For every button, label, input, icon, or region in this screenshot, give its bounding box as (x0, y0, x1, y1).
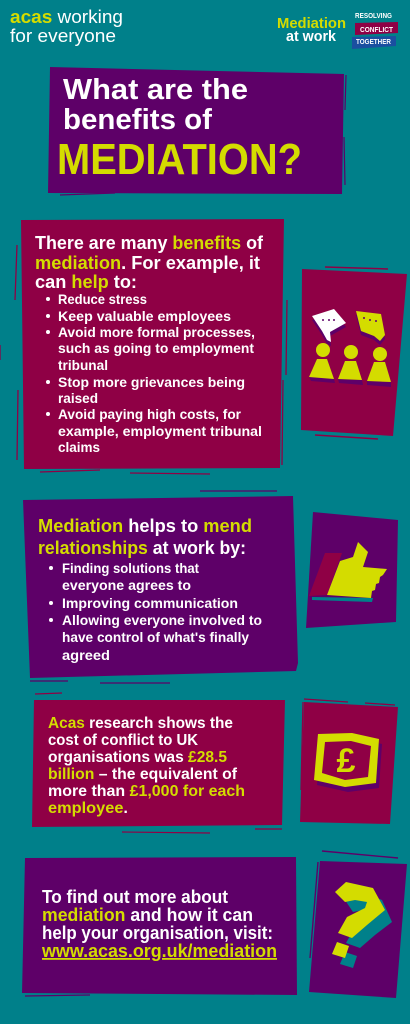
list: how mediation helps: Improving communication (62, 595, 238, 611)
text: find out more link: To find out more about (42, 887, 228, 907)
panel: mending relationships (23, 491, 298, 683)
list: benefits: raised (58, 390, 98, 406)
text: cost of conflict research: Acas research shows the (48, 715, 233, 732)
logo: mediation at work: TOGETHER (356, 39, 391, 46)
panel: title (48, 67, 346, 195)
icon: pound note: £ (337, 742, 356, 780)
logo: mediation at work: CONFLICT (360, 27, 394, 34)
title (57, 74, 302, 184)
panel: find out more (22, 857, 297, 996)
icon: thumbs up (306, 512, 398, 628)
heading: benefits intro (35, 233, 264, 292)
title: What are the (63, 74, 248, 106)
list: benefits: Reduce stress (58, 291, 147, 307)
text: cost of conflict research (48, 715, 245, 817)
heading: mend relationships: Mediation helps to mend (38, 516, 252, 536)
list: benefits (46, 291, 262, 455)
logo: acas working for everyone: acas working (10, 6, 123, 27)
list: benefits: such as going to employment (58, 340, 254, 356)
list: how mediation helps: agreed (62, 647, 110, 663)
icon: pound note (300, 699, 398, 824)
heading: benefits intro: mediation. For example, it (35, 253, 260, 273)
title: MEDIATION? (57, 135, 302, 184)
heading: benefits intro: There are many benefits of (35, 233, 264, 253)
list: benefits: example, employment tribunal (58, 423, 262, 439)
text: cost of conflict research: more than £1,000 for each (48, 783, 245, 800)
text: cost of conflict research: billion – the equivalent of (48, 766, 238, 783)
panel: cost of conflict (32, 693, 285, 833)
logo: acas working for everyone: for everyone (10, 25, 116, 46)
icon: people with speech bubbles (301, 267, 407, 439)
text: find out more link: help your organisation, visit: (42, 923, 273, 943)
list: benefits: Stop more grievances being (58, 374, 245, 390)
text: find out more link: mediation and how it can (42, 905, 253, 925)
text: cost of conflict research: employee. (48, 800, 128, 817)
logo: acas working for everyone (10, 6, 123, 46)
list: benefits: Avoid more formal processes, (58, 324, 255, 340)
list: benefits: claims (58, 439, 100, 455)
title: benefits of (63, 104, 212, 136)
list: how mediation helps: Finding solutions that (62, 560, 199, 576)
panel: benefits of mediation (0, 219, 287, 474)
heading: mend relationships: relationships at work by: (38, 538, 246, 558)
icon: question mark (309, 851, 407, 998)
text: find out more link: www.acas.org.uk/mediation (41, 941, 277, 961)
list: benefits: Keep valuable employees (58, 308, 231, 324)
list: how mediation helps: Allowing everyone involved to (62, 612, 262, 628)
list: benefits: tribunal (58, 357, 108, 373)
list: how mediation helps (49, 560, 262, 663)
text: find out more link (41, 887, 277, 961)
text: cost of conflict research: organisations was £28.5 (48, 749, 227, 766)
logo: mediation at work: RESOLVING (355, 13, 392, 20)
logo: mediation at work (277, 13, 398, 49)
logo: mediation at work: at work (286, 28, 337, 45)
text: cost of conflict research: cost of conflict to UK (48, 732, 198, 749)
list: benefits: Avoid paying high costs, for (58, 406, 242, 422)
logo: mediation at work: Mediation (277, 15, 346, 32)
list: how mediation helps: have control of what's finally (62, 629, 249, 645)
heading: benefits intro: can help to: (35, 272, 137, 292)
heading: mend relationships (38, 516, 252, 558)
list: how mediation helps: everyone agrees to (62, 577, 191, 593)
